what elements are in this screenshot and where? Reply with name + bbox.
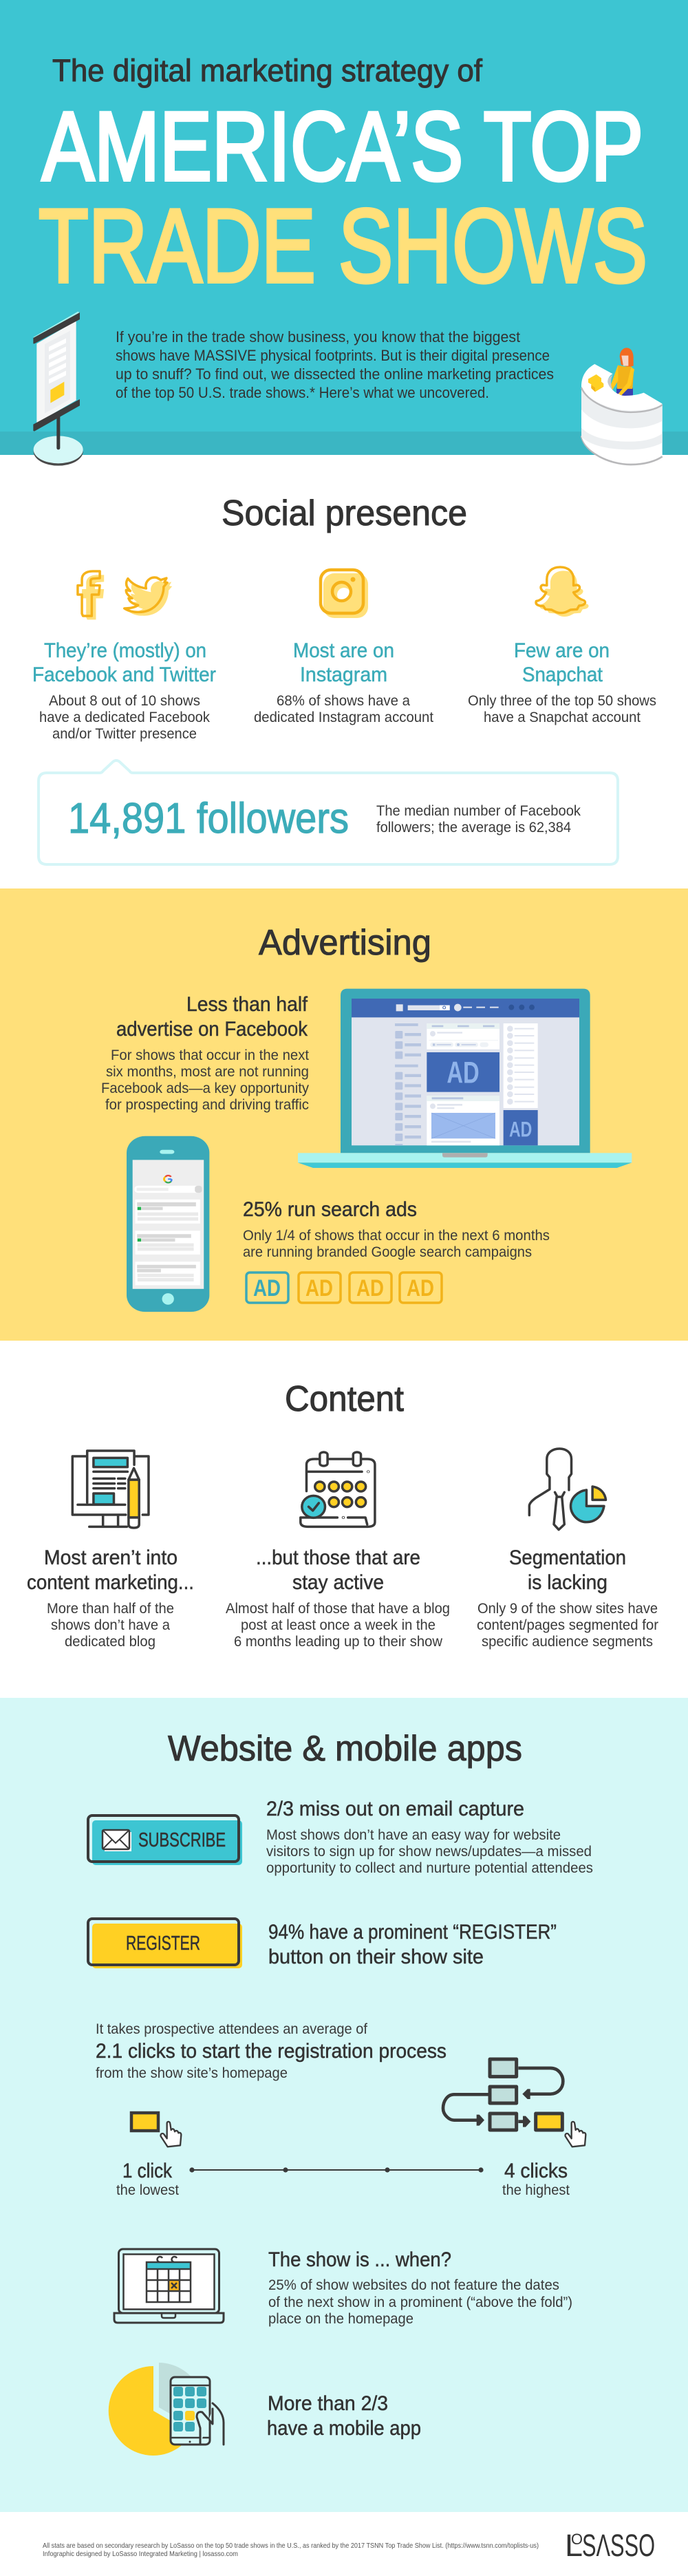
icon: laptop with facebook page [298, 989, 632, 1168]
label: AD: AD [447, 1056, 480, 1089]
column: facebook and twitter: They’re (mostly) on [44, 639, 206, 662]
label: 1 click [116, 2160, 179, 2198]
icon: hand cursor [566, 2122, 585, 2147]
column: facebook and twitter: Facebook and Twitter [32, 663, 216, 686]
logo: LoSasso: O [571, 2531, 583, 2548]
callout: followers: The median number of Facebook [376, 803, 581, 819]
label: 1 click: the lowest [116, 2182, 179, 2198]
footnote text [43, 2542, 539, 2558]
text: show dates: The show is ... when? [268, 2248, 451, 2271]
column: stay active [226, 1546, 450, 1650]
column: segmentation: Segmentation [509, 1546, 626, 1569]
button: register: REGISTER [126, 1933, 200, 1955]
text: register stat: 94% have a prominent “REGISTER” [268, 1921, 557, 1944]
icon: four AD badges: AD [305, 1275, 333, 1301]
icon: four AD badges [246, 1273, 442, 1303]
column: instagram: Instagram [300, 663, 387, 686]
column: segmentation [477, 1546, 658, 1650]
icon: four AD badges: AD [356, 1275, 384, 1301]
panel: hero [0, 0, 688, 466]
logo: LoSasso: L [565, 2528, 583, 2563]
column: facebook and twitter [32, 639, 216, 742]
logo: LoSasso: SΛSSO [582, 2528, 655, 2563]
button: subscribe: SUBSCRIBE [138, 1829, 226, 1851]
text: clicks stat: from the show site’s homepage [96, 2065, 288, 2081]
chart: click range line [189, 2167, 484, 2173]
icon: facebook [78, 571, 104, 619]
label: 4 clicks: the highest [502, 2182, 570, 2198]
column: snapchat: Snapchat [522, 663, 603, 686]
icon: phone with google search [127, 1136, 209, 1312]
text: facebook advertising: advertise on Facebook [116, 1018, 308, 1041]
text: facebook advertising: six months, most are not running [106, 1064, 309, 1080]
label: 1 click: 1 click [122, 2160, 173, 2182]
icon: reception desk with attendant [581, 348, 663, 465]
text: search ads: are running branded Google search campaigns [243, 1244, 532, 1260]
heading: social presence: Social presence [222, 493, 467, 533]
icon: person with pie chart [529, 1449, 605, 1530]
footnote text: All stats are based on secondary research by LoSasso on the top 50 trade shows in the U.S., as ranked by the 2017 TSNN Top Trade Show List. (https://www.tsnn.com/toplists-us) [43, 2542, 539, 2550]
intro text: up to snuff? To find out, we dissected the online marketing practices [116, 365, 554, 383]
text: facebook advertising: for prospecting and driving traffic [105, 1097, 309, 1113]
text: show dates: 25% of show websites do not feature the dates [268, 2277, 559, 2293]
callout: followers [39, 760, 618, 864]
column: snapchat: Only three of the top 50 shows [468, 693, 656, 709]
column: stay active: post at least once a week in the [241, 1617, 436, 1633]
heading: advertising: Advertising [259, 923, 431, 963]
column: instagram: Most are on [293, 639, 394, 662]
intro text: If you’re in the trade show business, you know that the biggest [116, 328, 521, 345]
column: facebook and twitter: have a dedicated Facebook [39, 710, 210, 725]
logo: LoSasso [565, 2528, 655, 2563]
text: mobile app [267, 2392, 421, 2440]
text: register stat: button on their show site [268, 1946, 484, 1968]
column: facebook and twitter: About 8 out of 10 shows [49, 693, 200, 709]
column: instagram [254, 639, 433, 725]
intro text [116, 328, 554, 401]
column: snapchat [468, 639, 656, 725]
text: clicks stat: It takes prospective attendees an average of [96, 2021, 367, 2037]
text: facebook advertising: For shows that occur in the next [111, 1047, 309, 1063]
callout: followers: followers; the average is 62,384 [376, 820, 571, 835]
icon: pie with phone and hand [109, 2363, 224, 2456]
intro text: shows have MASSIVE physical footprints. But is their digital presence [116, 347, 550, 364]
icon: four-click flow [443, 2059, 585, 2147]
text: clicks stat [96, 2021, 447, 2081]
title: intro line: The digital marketing strategy of [52, 53, 482, 88]
text: search ads [243, 1198, 550, 1260]
button: subscribe [88, 1816, 242, 1865]
intro text: of the top 50 U.S. trade shows.* Here’s what we uncovered. [116, 384, 489, 401]
column: snapchat: Few are on [514, 639, 610, 662]
heading: content: Content [285, 1379, 405, 1419]
text: show dates: of the next show in a prominent (“above the fold”) [268, 2295, 572, 2310]
icon: snapchat [536, 567, 589, 617]
column: segmentation: specific audience segments [482, 1634, 653, 1650]
icon: google G [164, 1175, 171, 1182]
column: blogging: dedicated blog [65, 1634, 155, 1650]
icon: instagram [321, 570, 368, 618]
footnote text: Infographic designed by LoSasso Integrated Marketing | losasso.com [43, 2550, 238, 2558]
column: blogging: More than half of the [47, 1601, 174, 1617]
icon: four AD badges: AD [407, 1275, 434, 1301]
icon: one click [131, 2113, 181, 2147]
column: snapchat: have a Snapchat account [484, 710, 641, 725]
text: email capture [266, 1798, 593, 1876]
icon: envelope [103, 1830, 131, 1851]
callout: followers: 14,891 followers [68, 795, 349, 842]
panel: social presence [32, 493, 656, 864]
text: search ads: Only 1/4 of shows that occur in the next 6 months [243, 1228, 550, 1244]
column: blogging [27, 1546, 194, 1650]
text: register stat [268, 1921, 557, 1968]
text: email capture: opportunity to collect and nurture potential attendees [266, 1860, 593, 1876]
text: search ads: 25% run search ads [243, 1198, 417, 1221]
icon: four AD badges: AD [253, 1275, 281, 1301]
panel: content [27, 1379, 658, 1650]
column: stay active: ...but those that are [256, 1546, 420, 1569]
column: stay active: Almost half of those that have a blog [226, 1601, 450, 1617]
label: 4 clicks: 4 clicks [504, 2160, 568, 2182]
text: facebook advertising: Less than half [186, 993, 308, 1016]
column: blogging: content marketing... [27, 1571, 194, 1594]
text: mobile app: have a mobile app [267, 2417, 421, 2440]
text: mobile app: More than 2/3 [268, 2392, 388, 2415]
column: blogging: shows don’t have a [51, 1617, 170, 1633]
column: stay active: 6 months leading up to their show [234, 1634, 443, 1650]
column: blogging: Most aren’t into [44, 1546, 178, 1569]
icon: banner stand [33, 312, 83, 466]
icon: hand cursor [161, 2122, 181, 2147]
attendant [608, 348, 634, 398]
text: clicks stat: 2.1 clicks to start the registration process [96, 2040, 447, 2063]
text: email capture: 2/3 miss out on email capture [266, 1798, 524, 1820]
footer [43, 2528, 655, 2563]
label: 4 clicks [502, 2160, 570, 2198]
panel: website and mobile apps [0, 1698, 688, 2512]
icon: laptop with calendar [114, 2249, 224, 2323]
icon: calendar with check [301, 1452, 375, 1526]
column: segmentation: content/pages segmented for [477, 1617, 658, 1633]
text: show dates: place on the homepage [268, 2311, 413, 2327]
text: facebook advertising [101, 993, 309, 1113]
heading: website and mobile apps: Website & mobile apps [168, 1729, 522, 1769]
column: stay active: stay active [292, 1571, 384, 1594]
text: email capture: visitors to sign up for show news/updates—a missed [266, 1844, 592, 1860]
column: segmentation: is lacking [528, 1571, 608, 1594]
icon: blog on monitor with pencil [72, 1451, 149, 1528]
column: facebook and twitter: and/or Twitter presence [52, 726, 197, 742]
label: small AD: AD [509, 1118, 532, 1142]
icon: twitter [125, 577, 172, 616]
text: facebook advertising: Facebook ads—a key opportunity [101, 1081, 309, 1096]
column: instagram: 68% of shows have a [277, 693, 410, 709]
column: segmentation: Only 9 of the show sites have [477, 1601, 658, 1617]
button: register [88, 1919, 242, 1968]
text: show dates [268, 2248, 572, 2327]
column: instagram: dedicated Instagram account [254, 710, 433, 725]
text: email capture: Most shows don’t have an easy way for website [266, 1827, 561, 1843]
panel: advertising [0, 888, 688, 1341]
